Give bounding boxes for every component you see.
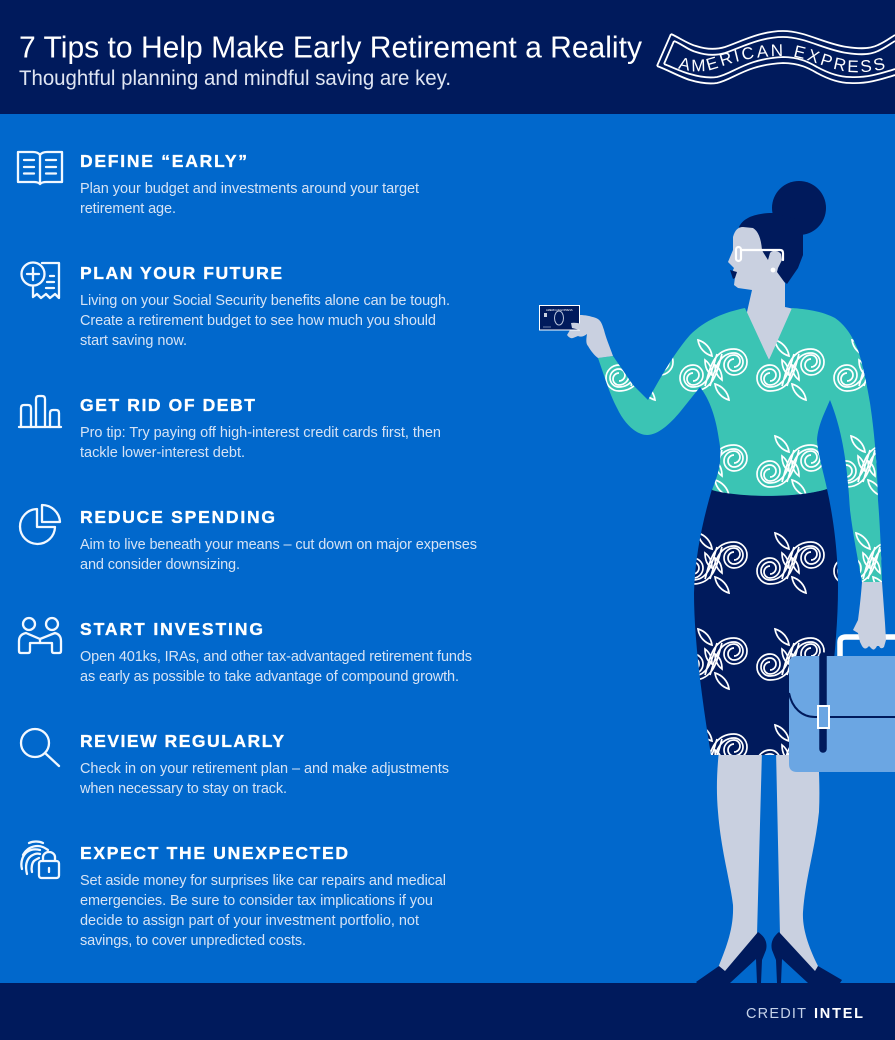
body text: savings, to cover unpredicted costs. — [80, 933, 306, 949]
skirt — [694, 489, 838, 755]
tip 1: define early — [18, 151, 419, 217]
footer wordmark — [746, 1006, 863, 1022]
tip 4: reduce spending — [20, 505, 477, 573]
body text: Open 401ks, IRAs, and other tax-advantaged retirement funds — [80, 649, 472, 665]
body text: Plan your budget and investments around your target — [80, 181, 419, 197]
body text — [80, 649, 472, 685]
tip 5: start investing — [19, 618, 472, 685]
hand holding card — [567, 315, 613, 358]
body text: emergencies. Be sure to consider tax implications if you — [80, 893, 433, 909]
body text: when necessary to stay on track. — [79, 781, 287, 797]
icon: bar chart — [19, 396, 61, 427]
thumb — [571, 323, 590, 331]
body text — [80, 293, 450, 349]
body text: decide to assign part of your investment portfolio, not — [80, 913, 419, 929]
bag handle — [840, 637, 895, 657]
heading: GET RID OF DEBT — [80, 395, 255, 415]
body text — [80, 181, 419, 217]
body text — [80, 425, 441, 461]
body text: Check in on your retirement plan – and make adjustments — [80, 761, 449, 777]
footer band — [0, 983, 895, 1040]
hair and bun — [739, 181, 826, 284]
arm hand holding bag — [853, 582, 886, 650]
tip 7: expect the unexpected — [21, 842, 446, 949]
earring — [771, 268, 775, 272]
heading: DEFINE “EARLY” — [80, 151, 247, 171]
body text: start saving now. — [80, 333, 187, 349]
logo wordmark: AMERICAN EXPRESS — [678, 44, 884, 72]
body text: retirement age. — [80, 201, 176, 217]
face and neck — [728, 227, 794, 360]
body text: tackle lower-interest debt. — [80, 445, 245, 461]
illustration: woman with card and briefcase — [540, 181, 895, 983]
heading: PLAN YOUR FUTURE — [80, 263, 282, 283]
body text — [79, 761, 449, 797]
heading: REVIEW REGULARLY — [80, 731, 284, 751]
subtitle: Thoughtful planning and mindful saving are key. — [19, 67, 451, 90]
icon: open book — [18, 152, 62, 184]
title: 7 Tips to Help Make Early Retirement a Reality — [19, 30, 642, 64]
body text: Set aside money for surprises like car repairs and medical — [80, 873, 446, 889]
heading: EXPECT THE UNEXPECTED — [80, 843, 348, 863]
tip 3: get rid of debt — [19, 395, 441, 461]
heading: REDUCE SPENDING — [80, 507, 275, 527]
glasses — [736, 247, 783, 261]
icon: handshake — [19, 618, 61, 653]
icon: magnifying glass — [21, 729, 59, 766]
bag body — [789, 656, 895, 772]
body text: Pro tip: Try paying off high-interest credit cards first, then — [80, 425, 441, 441]
icon: receipt with plus — [22, 262, 59, 298]
body text — [80, 873, 446, 949]
tip 6: review regularly — [21, 729, 449, 797]
heading: START INVESTING — [80, 619, 263, 639]
tip 2: plan your future — [22, 262, 450, 349]
icon: fingerprint and padlock — [21, 842, 59, 878]
lips — [730, 270, 737, 279]
credit card — [540, 306, 580, 330]
body text: Living on your Social Security benefits alone can be tough. — [80, 293, 450, 309]
shoes — [696, 932, 842, 983]
briefcase — [789, 656, 895, 772]
logo: American Express wave — [656, 30, 895, 84]
footer wordmark: INTEL — [814, 1006, 863, 1022]
header band — [0, 0, 895, 114]
body text — [80, 537, 477, 573]
body text: Aim to live beneath your means – cut down on major expenses — [80, 537, 477, 553]
blouse — [598, 308, 895, 593]
footer wordmark: CREDIT — [746, 1006, 806, 1022]
credit card: AMERICAN EXPRESS — [546, 308, 573, 312]
body text: Create a retirement budget to see how much you should — [80, 313, 436, 329]
legs — [717, 750, 819, 972]
body text: as early as possible to take advantage of compound growth. — [80, 669, 459, 685]
body text: and consider downsizing. — [80, 557, 240, 573]
icon: pie chart — [20, 505, 60, 544]
